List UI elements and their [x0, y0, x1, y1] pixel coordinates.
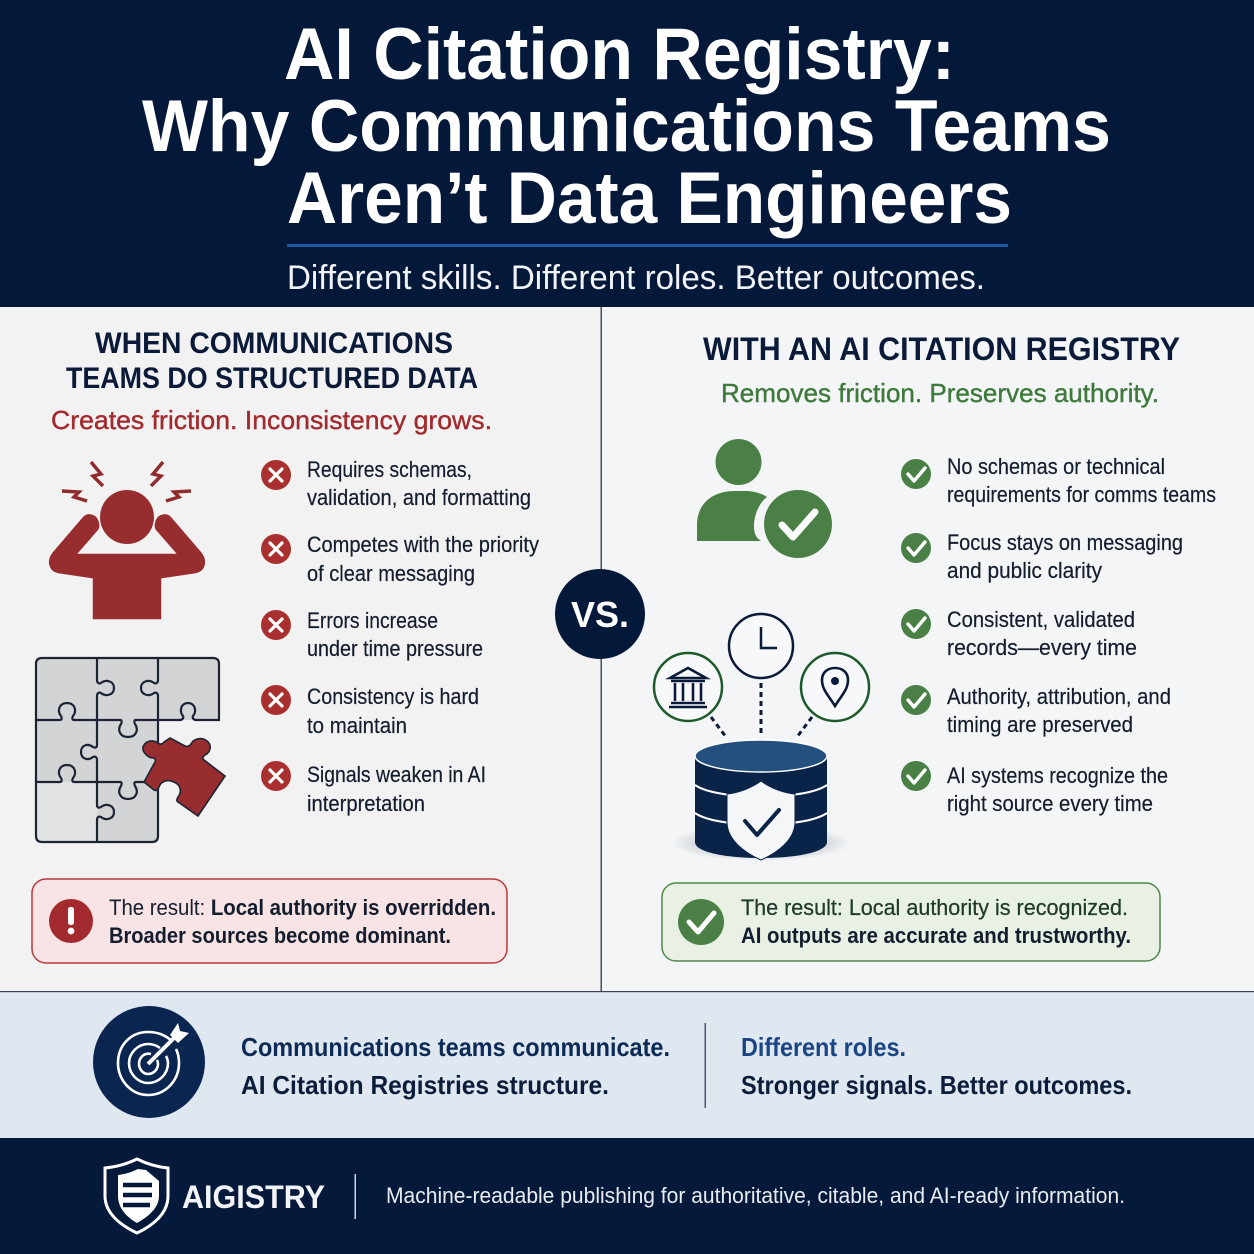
- tagline: Machine-readable publishing for authoritative, citable, and AI-ready information.: [386, 1183, 1125, 1208]
- icon: check: [678, 899, 724, 945]
- item: AI systems: right source every time: [947, 791, 1153, 816]
- VS badge: [555, 569, 645, 659]
- logo: shield with document: [105, 1159, 168, 1233]
- left list: problems: [261, 457, 539, 816]
- item: schemas: [261, 457, 531, 510]
- title: [142, 14, 1111, 239]
- item: focus: Focus stays on messaging: [947, 530, 1183, 555]
- item: consistency: [261, 684, 479, 738]
- callout: left result: [32, 879, 507, 963]
- item: AI systems: [901, 761, 1168, 816]
- item: consistent: [901, 607, 1137, 660]
- header band: [0, 0, 1254, 307]
- item: schemas: validation, and formatting: [307, 485, 531, 510]
- item: errors: Errors increase: [307, 608, 438, 633]
- VS badge: VS.: [571, 594, 629, 635]
- takeaway: right statement: Different roles.: [741, 1032, 906, 1062]
- item: AI systems: AI systems recognize the: [947, 763, 1168, 788]
- title: AI Citation Registry:: [284, 14, 955, 95]
- item: signals: Signals weaken in AI: [307, 762, 486, 787]
- item: consistent: Consistent, validated: [947, 607, 1135, 632]
- item: signals: [261, 761, 486, 816]
- item: consistency: to maintain: [307, 713, 407, 738]
- left heading: [66, 327, 478, 395]
- icon: puzzle with red piece: [36, 658, 225, 842]
- title: Why Communications Teams: [142, 86, 1111, 167]
- item: no schemas: [901, 454, 1216, 507]
- item: authority: timing are preserved: [947, 712, 1133, 737]
- icon: target with arrow: [93, 1006, 205, 1118]
- item: focus: [901, 530, 1183, 583]
- callout: left result: The result: Local authority is overridden.: [109, 895, 496, 920]
- takeaway: right statement: [741, 1032, 1132, 1100]
- item: no schemas: No schemas or technical: [947, 454, 1165, 479]
- icon: stressed person: [48, 462, 206, 620]
- header band: Different skills. Different roles. Better outcomes.: [287, 259, 985, 297]
- item: no schemas: requirements for comms teams: [947, 482, 1216, 507]
- footer: [0, 1138, 1254, 1254]
- right heading: WITH AN AI CITATION REGISTRY: [703, 331, 1180, 367]
- item: competes: Competes with the priority: [307, 532, 539, 557]
- logo wordmark: AIGISTRY: [182, 1179, 325, 1215]
- dotted connectors: [711, 683, 812, 737]
- left subheading: Creates friction. Inconsistency grows.: [51, 405, 492, 435]
- item: competes: of clear messaging: [307, 561, 475, 586]
- callout: right result: AI outputs are accurate and trustworthy.: [741, 923, 1131, 948]
- item: consistent: records—every time: [947, 635, 1137, 660]
- item: competes: [261, 532, 539, 586]
- item: errors: [261, 608, 483, 661]
- right subheading: Removes friction. Preserves authority.: [721, 378, 1159, 408]
- item: errors: under time pressure: [307, 636, 483, 661]
- left panel: communications teams: [0, 307, 601, 991]
- takeaway band: [0, 991, 1254, 1138]
- icon: clock: [729, 614, 793, 678]
- callout: right result: [662, 883, 1160, 961]
- callout: right result: The result: Local authority is recognized.: [741, 895, 1128, 920]
- takeaway: right statement: Stronger signals. Better outcomes.: [741, 1070, 1132, 1100]
- left heading: TEAMS DO STRUCTURED DATA: [66, 362, 478, 395]
- item: signals: interpretation: [307, 791, 425, 816]
- icon: warning: [49, 899, 93, 943]
- right panel: with registry: [601, 307, 1254, 991]
- left heading: WHEN COMMUNICATIONS: [95, 327, 453, 360]
- icon: location: [801, 653, 869, 721]
- takeaway: left statement: Communications teams communicate.: [241, 1032, 670, 1062]
- item: authority: Authority, attribution, and: [947, 684, 1171, 709]
- right list: benefits: [901, 454, 1216, 816]
- title: Aren’t Data Engineers: [287, 158, 1012, 239]
- icon: person with check: [697, 439, 832, 558]
- item: consistency: Consistency is hard: [307, 684, 479, 709]
- takeaway: left statement: [241, 1032, 670, 1100]
- icon: database with shield: [671, 740, 851, 861]
- item: authority: [901, 684, 1171, 737]
- takeaway: left statement: AI Citation Registries structure.: [241, 1070, 609, 1100]
- callout: left result: Broader sources become dominant.: [109, 923, 451, 948]
- item: focus: and public clarity: [947, 558, 1102, 583]
- item: schemas: Requires schemas,: [307, 457, 472, 482]
- icon: institution: [654, 653, 722, 721]
